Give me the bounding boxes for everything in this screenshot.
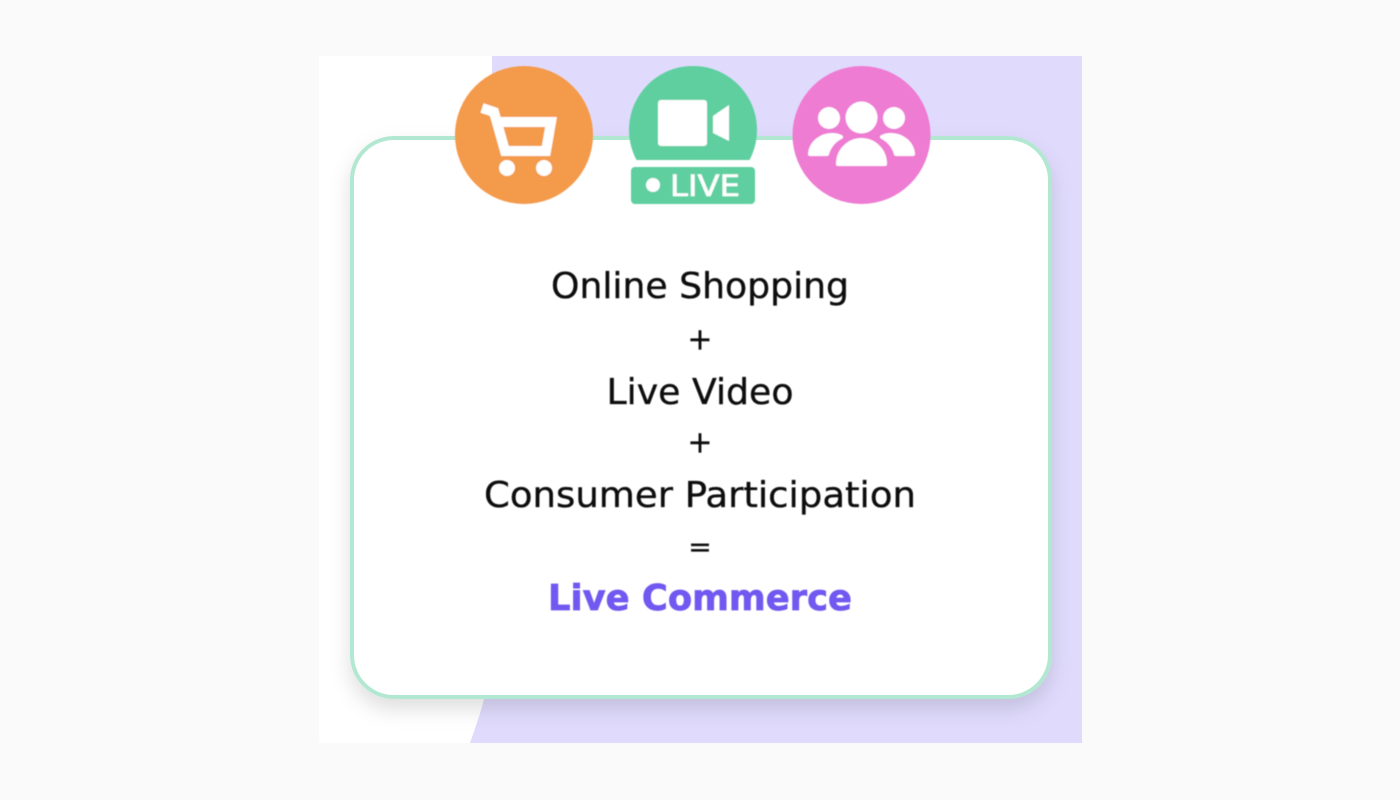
line: live video: Live Video bbox=[606, 372, 794, 413]
icon: live video camera bbox=[629, 66, 757, 204]
lavender background shape bbox=[470, 56, 1082, 743]
live badge: LIVE bbox=[670, 169, 740, 203]
panel: white backdrop bbox=[319, 56, 1082, 743]
line: online shopping: Online Shopping bbox=[551, 266, 849, 307]
plus sign: + bbox=[687, 322, 713, 358]
text block: equation bbox=[484, 266, 916, 619]
panel: equation card bbox=[352, 138, 1050, 697]
icon: shopping cart bbox=[455, 66, 593, 204]
plus sign: + bbox=[687, 426, 713, 460]
icon: group of consumers bbox=[792, 66, 930, 204]
line: consumer participation: Consumer Participation bbox=[484, 475, 916, 516]
icon row bbox=[455, 66, 930, 204]
equals sign: = bbox=[688, 530, 712, 564]
result: live commerce: Live Commerce bbox=[548, 578, 852, 619]
